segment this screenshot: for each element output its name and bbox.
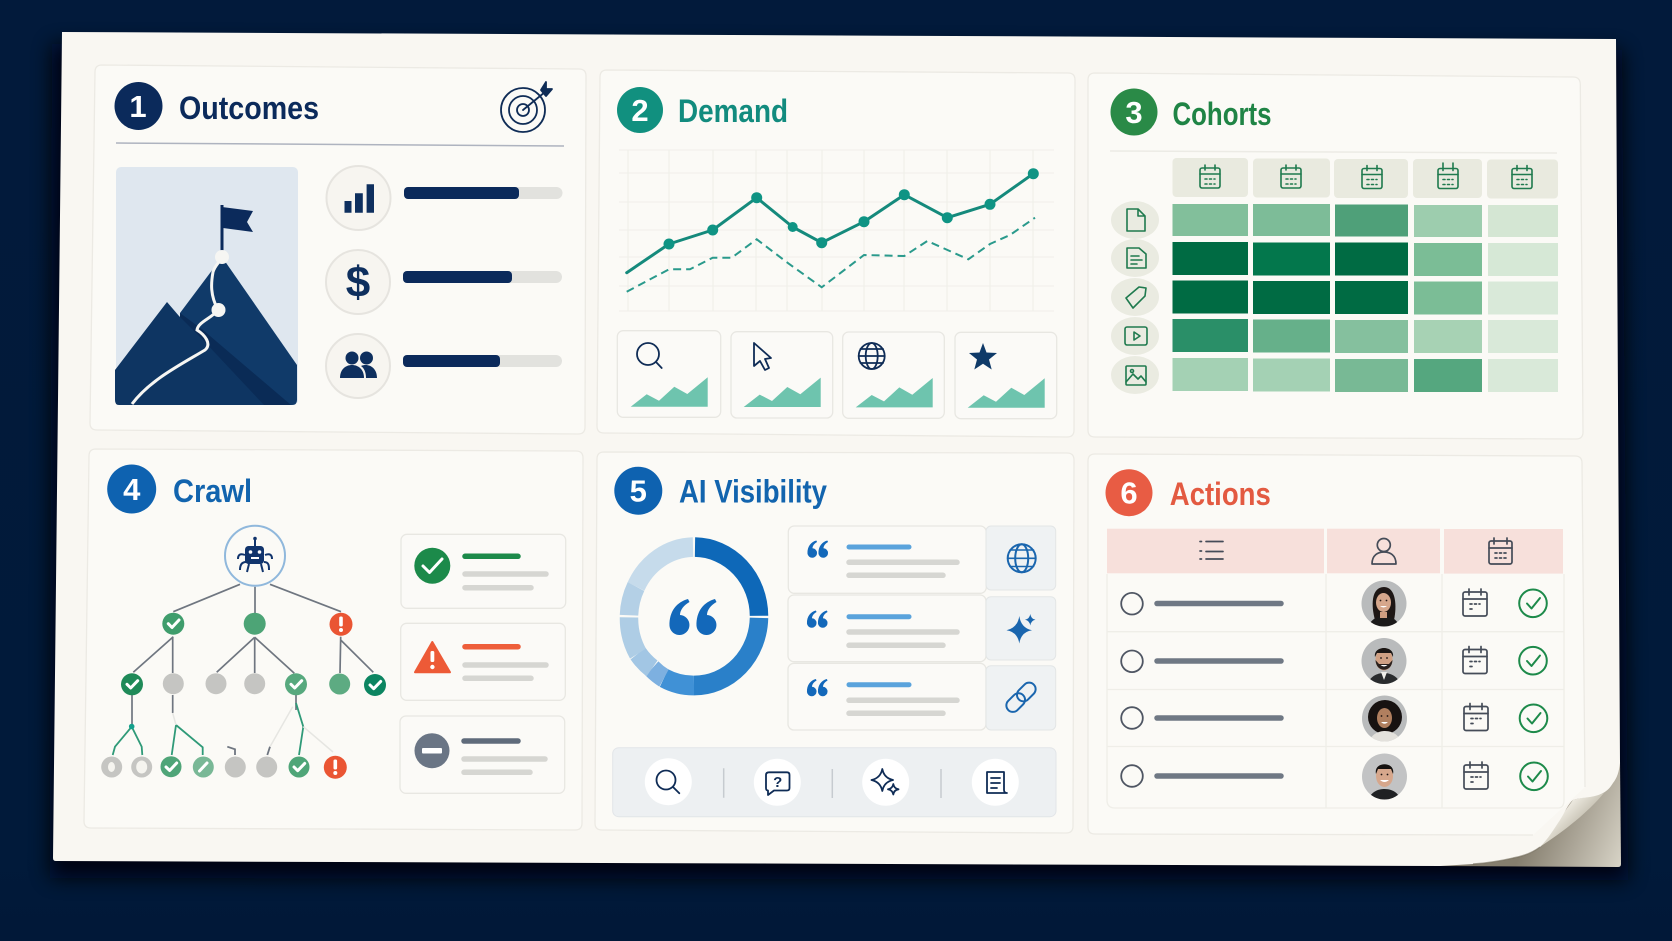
level 1 nodes (162, 613, 352, 636)
crawl heading: Crawl (173, 473, 252, 509)
demand number badge (617, 87, 663, 133)
cohort row icons (1111, 201, 1159, 394)
row 2 task (1121, 650, 1281, 672)
outcomes number badge (114, 82, 162, 130)
due dates and status row 1 (1463, 589, 1547, 617)
outcomes number badge: 1 (129, 89, 147, 124)
demand number badge: 2 (631, 93, 649, 128)
query toolbar (613, 748, 1056, 817)
crawler robot node (225, 526, 285, 586)
actions heading: Actions (1170, 476, 1271, 512)
table header (1107, 529, 1563, 574)
avatar 1 (1362, 580, 1406, 626)
cohorts heading: Cohorts (1172, 96, 1272, 132)
panel: crawl (84, 449, 583, 830)
crawl tree (101, 526, 386, 779)
row 1 task (1121, 593, 1281, 614)
status card: warning (401, 623, 565, 700)
metric: chart (326, 166, 562, 230)
panel: outcomes (90, 65, 586, 434)
ai visibility number badge (614, 467, 662, 515)
panel: ai visibility (595, 452, 1074, 833)
metric: revenue (326, 250, 562, 314)
level 2 nodes (121, 673, 386, 696)
card: search (617, 331, 721, 417)
status card: neutral (400, 716, 565, 793)
crawl number badge (107, 464, 156, 514)
card: rating (955, 332, 1057, 419)
mountain illustration (115, 167, 298, 405)
avatar 2 (1362, 638, 1406, 684)
due dates and status row 4 (1464, 762, 1548, 790)
donut chart (629, 547, 759, 686)
due dates and status row 3 (1464, 704, 1547, 732)
cohorts number badge (1110, 88, 1158, 136)
demand heading: Demand (678, 93, 788, 129)
panel: demand (597, 70, 1075, 437)
citation row 3 (788, 663, 1056, 730)
citation row 2 (788, 595, 1056, 662)
row 3 task (1121, 707, 1281, 729)
panel: cohorts (1088, 73, 1583, 439)
avatar 4 (1362, 754, 1407, 800)
due dates and status row 2 (1463, 646, 1547, 674)
crawl number badge: 4 (123, 472, 141, 507)
card: clicks (731, 332, 833, 418)
actions number badge (1106, 469, 1152, 516)
panel: actions (1088, 454, 1585, 835)
action table (1107, 529, 1564, 808)
heatmap cells (1172, 204, 1558, 392)
table grid (1107, 574, 1564, 808)
actions number badge: 6 (1120, 476, 1138, 511)
card: web (843, 332, 944, 418)
metric: revenue: $ (346, 258, 370, 307)
icon: target (501, 82, 552, 132)
citation row 1 (788, 526, 1056, 593)
line chart (619, 150, 1054, 311)
heatmap column headers (1172, 158, 1558, 198)
level 3 nodes (101, 756, 347, 779)
outcomes heading: Outcomes (179, 90, 319, 126)
ai visibility heading: AI Visibility (679, 474, 827, 510)
metric: audience (326, 334, 562, 398)
row 4 task (1121, 765, 1281, 787)
avatar 3 (1362, 696, 1407, 742)
ai visibility number badge: 5 (630, 474, 647, 509)
query toolbar: ? (773, 774, 782, 791)
status card: pass (401, 534, 566, 608)
cohorts number badge: 3 (1125, 95, 1143, 130)
